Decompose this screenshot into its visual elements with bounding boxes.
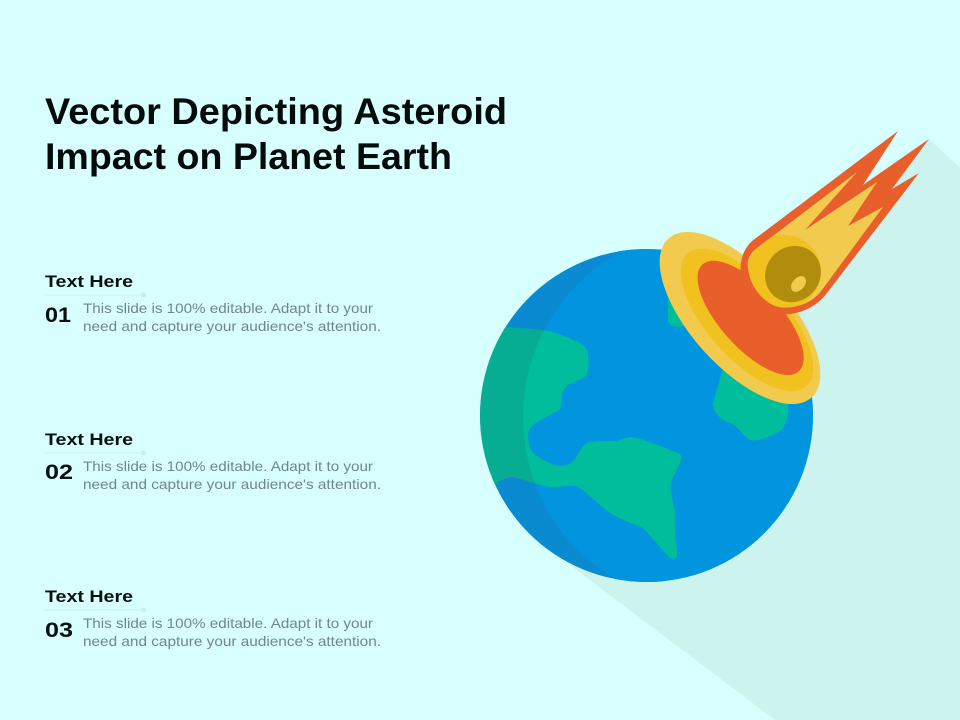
item 02 description: This slide is 100% editable. Adapt it to your bbox=[83, 458, 373, 474]
item 03 bbox=[45, 587, 381, 649]
asteroid glow bbox=[747, 235, 821, 309]
item 02 bbox=[45, 430, 381, 492]
continent: right bbox=[713, 370, 788, 440]
item 01 bbox=[45, 272, 381, 334]
asteroid highlight bbox=[788, 273, 809, 295]
title bbox=[45, 91, 507, 177]
icon: asteroid with flames bbox=[740, 131, 929, 314]
title: Vector Depicting Asteroid bbox=[45, 91, 507, 132]
globe ocean shade bbox=[480, 249, 813, 582]
flame fill bbox=[748, 172, 883, 308]
continent: upper bbox=[668, 297, 684, 327]
item 02 number: 02 bbox=[45, 461, 73, 484]
continent: shaded part bbox=[470, 327, 681, 559]
item 03 number: 03 bbox=[45, 619, 73, 642]
item 01 heading: Text Here bbox=[45, 272, 133, 291]
item 01 number: 01 bbox=[45, 304, 71, 327]
item 03 description: need and capture your audience's attention. bbox=[83, 633, 381, 649]
middle ring bbox=[658, 228, 836, 412]
icon: impact rings bbox=[632, 206, 848, 430]
item 03 description: This slide is 100% editable. Adapt it to your bbox=[83, 615, 373, 631]
item 01 description: need and capture your audience's attention. bbox=[83, 318, 381, 334]
asteroid rock bbox=[754, 234, 832, 314]
red core bbox=[680, 244, 821, 391]
item 03 heading: Text Here bbox=[45, 587, 133, 606]
flame outline bbox=[740, 131, 929, 314]
item 01 description: This slide is 100% editable. Adapt it to your bbox=[83, 300, 373, 316]
item 02 description: need and capture your audience's attention. bbox=[83, 476, 381, 492]
continent: americas bbox=[523, 330, 682, 559]
outer ring bbox=[632, 206, 848, 430]
globe ocean light bbox=[528, 249, 813, 582]
icon: planet earth bbox=[480, 249, 813, 582]
title: Impact on Planet Earth bbox=[45, 136, 452, 177]
item 02 heading: Text Here bbox=[45, 430, 133, 449]
long shadow bbox=[570, 139, 960, 720]
